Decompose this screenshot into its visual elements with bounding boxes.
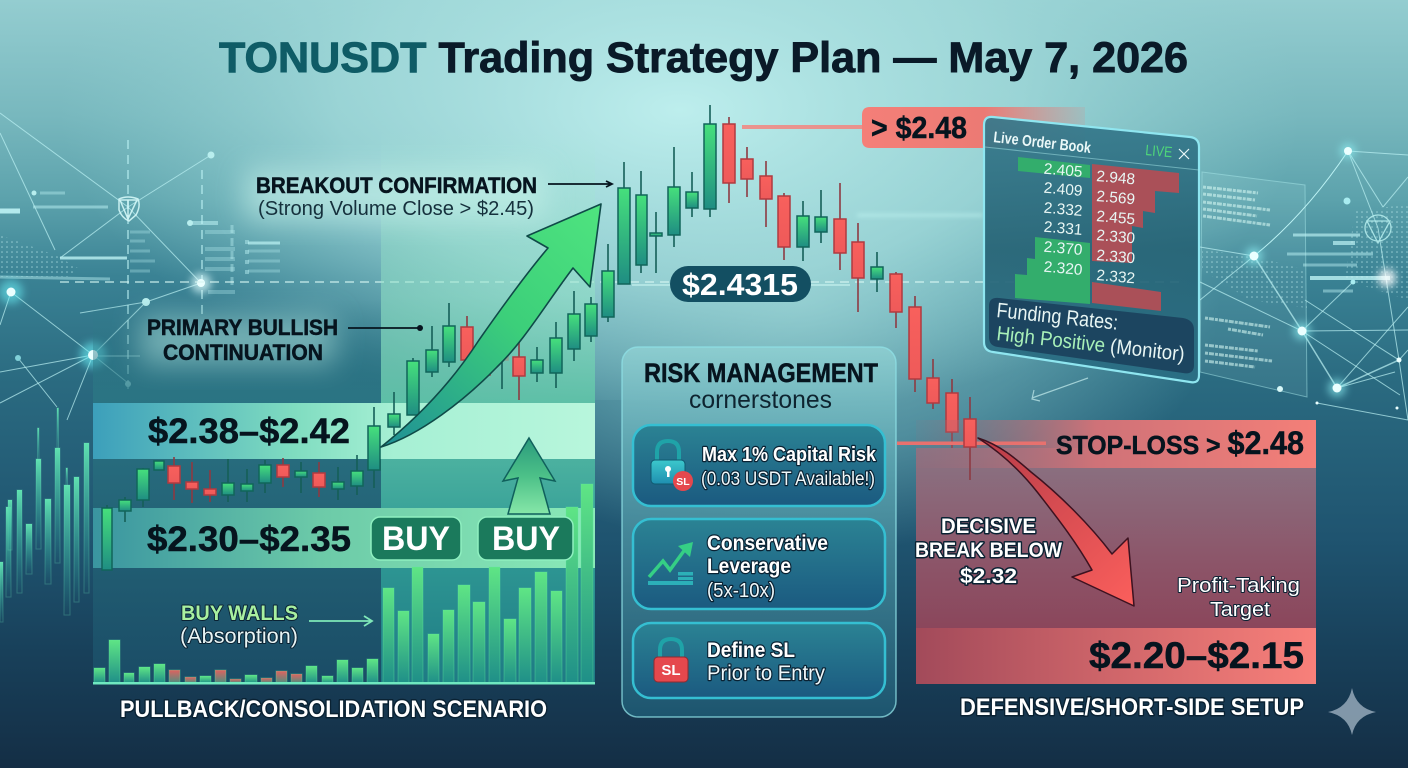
ask prices: 2.332	[1096, 267, 1136, 287]
header text: Live Order Book	[993, 129, 1092, 157]
card text	[707, 639, 825, 685]
label: primary bullish continuation: CONTINUATION	[163, 340, 323, 365]
label: decisive break below: DECISIVE	[941, 515, 1036, 538]
pointer: primary bullish	[348, 325, 423, 331]
label: buy walls: (Absorption)	[180, 625, 298, 648]
ask prices: 2.948	[1096, 168, 1136, 188]
button: BUY 2	[478, 517, 573, 560]
arrow: buy walls pointer	[309, 616, 372, 626]
left panel shading	[93, 300, 381, 684]
funding rates box	[989, 298, 1194, 373]
label: buy walls: BUY WALLS	[181, 602, 298, 625]
label: primary bullish continuation	[147, 315, 338, 365]
panel: pullback consolidation scenario	[93, 130, 595, 684]
label: profit-taking target: Profit-Taking	[1177, 575, 1300, 597]
card text: Prior to Entry	[707, 662, 825, 685]
dashed current price line	[60, 281, 1180, 283]
card: max capital risk	[633, 425, 885, 506]
current price pill: $2.4315	[682, 267, 798, 302]
card text: Leverage	[707, 555, 791, 578]
baseline	[93, 682, 595, 684]
label: breakout confirmation	[256, 173, 537, 220]
card text: Max 1% Capital Risk	[702, 444, 877, 466]
callout: > $2.48	[862, 107, 1085, 148]
label: decisive break below: $2.32	[960, 565, 1017, 588]
card text: Conservative	[707, 532, 828, 555]
label: breakout confirmation: (Strong Volume Close > $2.45)	[258, 198, 534, 220]
icon: sparkle	[1328, 688, 1376, 735]
card text: (0.03 USDT Available!)	[701, 468, 875, 490]
bid prices: 2.331	[1043, 219, 1083, 239]
small pointer under order book	[1032, 378, 1088, 401]
right network glow nodes	[1245, 143, 1402, 410]
halo behind primary label	[140, 315, 335, 365]
zone band: stop-loss	[916, 420, 1316, 468]
label: primary bullish continuation: PRIMARY BULLISH	[147, 315, 338, 340]
ask prices: 2.330	[1096, 227, 1136, 247]
icon: SL lock	[654, 639, 688, 682]
section label: pullback/consolidation scenario: PULLBACK/CONSOLIDATION SCENARIO	[120, 696, 547, 723]
bid prices	[1043, 161, 1084, 279]
arrow: buy zone up arrow	[503, 438, 555, 514]
right panel shading	[381, 130, 595, 684]
label: stop-loss: STOP-LOSS > $2.48	[1056, 425, 1304, 461]
ask prices: 2.330	[1096, 247, 1136, 267]
zone band: $2.38–$2.42	[93, 403, 595, 459]
label: target range: $2.20–$2.15	[1089, 635, 1304, 676]
funding rates box: Funding Rates:	[995, 299, 1119, 335]
bid prices: 2.409	[1043, 180, 1083, 200]
bid depth	[1015, 157, 1090, 304]
label: breakout confirmation: BREAKOUT CONFIRMATION	[256, 173, 537, 198]
stop-loss line	[897, 442, 1046, 445]
label: decisive break below: BREAK BELOW	[915, 539, 1062, 562]
title: TONUSDT Trading Strategy Plan — May 7, 2026	[219, 34, 1188, 82]
card: conservative leverage	[633, 519, 885, 609]
card text	[701, 444, 877, 490]
streak beside order book	[857, 214, 983, 216]
label: buy walls	[180, 602, 298, 648]
button: BUY 1: BUY	[382, 520, 450, 558]
background bar chart on far left	[0, 408, 89, 622]
bid prices: 2.370	[1043, 239, 1084, 259]
card text	[707, 532, 828, 602]
arrow: green bullish	[381, 204, 601, 447]
card text: (5x-10x)	[707, 580, 775, 602]
live status: LIVE	[1145, 142, 1173, 161]
callout: > $2.48: > $2.48	[871, 110, 967, 145]
icon: left TON logo	[119, 197, 139, 221]
right background network	[1200, 151, 1408, 420]
candlesticks: consolidation	[102, 407, 380, 570]
icon: rising chart	[648, 542, 693, 585]
left background network	[0, 113, 280, 420]
icon: lock with SL badge: SL	[676, 476, 690, 488]
label: profit-taking target: Target	[1210, 599, 1270, 621]
bid prices: 2.405	[1043, 161, 1083, 181]
panel: defensive short-side setup	[897, 420, 1316, 684]
ask prices: 2.455	[1096, 208, 1136, 228]
candlesticks: primary bullish continuation	[388, 105, 716, 435]
panel: live order book	[984, 117, 1199, 382]
ask prices	[1096, 168, 1136, 287]
ask depth	[1092, 164, 1179, 311]
current price pill	[632, 266, 850, 302]
heading: risk management: RISK MANAGEMENT	[644, 358, 878, 388]
bid prices: 2.332	[1043, 200, 1083, 220]
right glass data panel	[1200, 172, 1307, 397]
label: $2.38–$2.42: $2.38–$2.42	[148, 412, 350, 451]
button: BUY 2: BUY	[492, 520, 560, 558]
icon: SL lock: SL	[661, 662, 681, 679]
subheading: cornerstones: cornerstones	[689, 386, 832, 414]
panel: risk management cornerstones	[622, 347, 896, 717]
zone band: $2.30–$2.35	[93, 508, 595, 568]
icon: lock with SL badge	[651, 441, 693, 491]
arrow: red bearish	[978, 438, 1134, 606]
label: $2.30–$2.35: $2.30–$2.35	[147, 520, 351, 559]
card: define SL	[633, 623, 885, 698]
section label: defensive/short-side setup: DEFENSIVE/SHORT-SIDE SETUP	[960, 694, 1304, 721]
label: decisive break below	[915, 515, 1062, 588]
ask prices: 2.569	[1096, 188, 1136, 208]
candlestick: last bearish	[964, 397, 976, 480]
halo behind breakout label	[245, 170, 545, 220]
card text: Define SL	[707, 639, 795, 662]
bid prices: 2.320	[1043, 259, 1084, 279]
pointer: breakout	[548, 181, 612, 187]
icon: right TON logo	[1365, 215, 1391, 243]
volume bars	[94, 484, 593, 683]
zone band: profit target	[916, 628, 1316, 684]
candlesticks: decline	[723, 117, 958, 460]
left network glow nodes	[0, 152, 214, 387]
funding rates box: High Positive (Monitor)	[995, 322, 1186, 366]
label: profit-taking target	[1177, 575, 1300, 621]
connector: > $2.48	[742, 125, 864, 129]
